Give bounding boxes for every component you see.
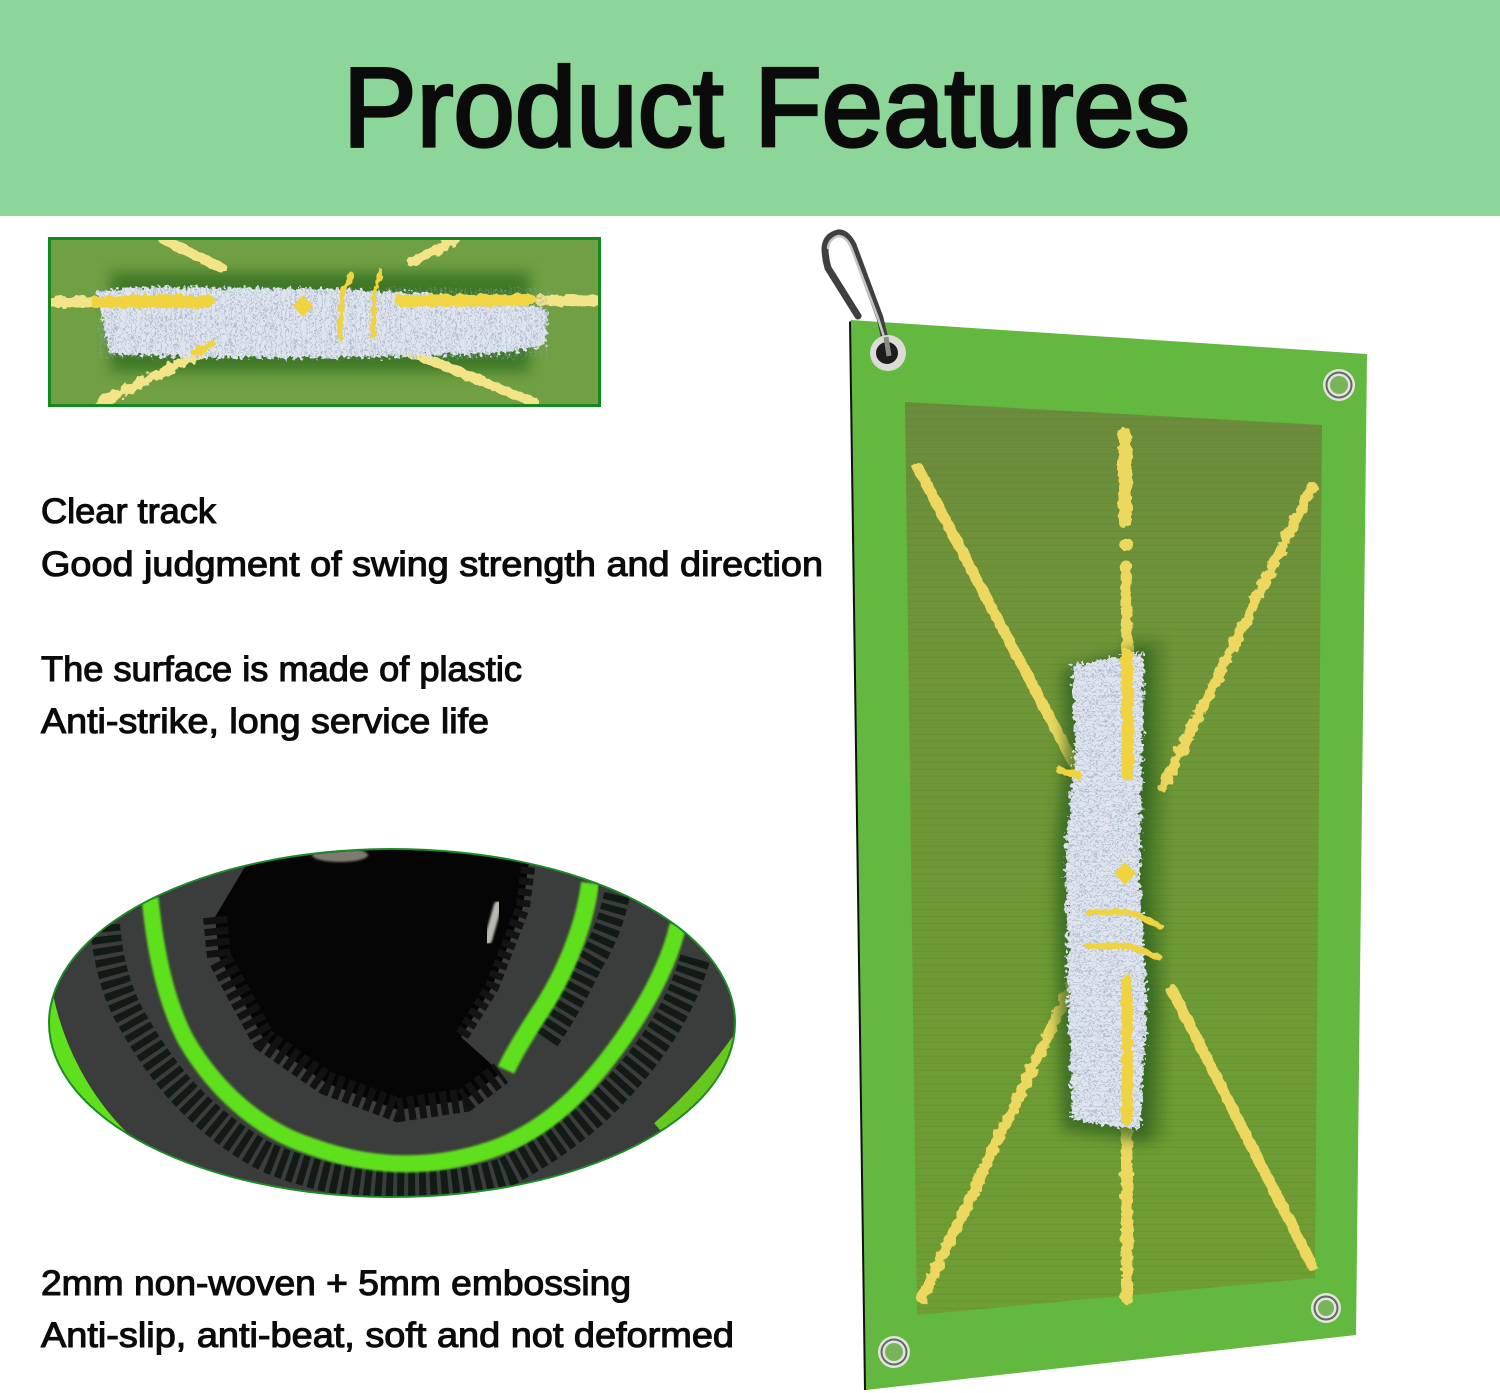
mat turf surface — [900, 400, 1330, 1320]
carabiner clip — [825, 233, 888, 352]
text block: plastic surface — [41, 650, 522, 741]
text block: plastic surface: Anti-strike, long service life — [41, 702, 489, 741]
metal glint — [488, 905, 498, 940]
inner right teeth row — [546, 895, 617, 1040]
black interior — [215, 845, 535, 1110]
text block: material layers: Anti-slip, anti-beat, soft and not deformed — [41, 1316, 734, 1355]
text block: clear track — [41, 492, 823, 584]
text block: plastic surface: The surface is made of plastic — [41, 650, 522, 689]
yellow guide lines — [918, 434, 1312, 1298]
product photo: swing mat — [825, 233, 1367, 1390]
text block: clear track: Good judgment of swing strength and direction — [41, 545, 823, 584]
green felt bands — [44, 883, 745, 1164]
header banner — [0, 0, 1500, 216]
mat felt border — [849, 320, 1367, 1390]
text block: clear track: Clear track — [41, 492, 217, 531]
panel: close-up of clear swing track — [48, 237, 601, 407]
white impact mark — [1055, 645, 1156, 1142]
yellow marks on impact area — [1060, 655, 1160, 1120]
grommet bottom left — [878, 1336, 910, 1368]
grommet top left — [870, 335, 906, 371]
text block: material layers: 2mm non-woven + 5mm embossing — [41, 1264, 631, 1303]
text block: material layers — [41, 1264, 734, 1355]
outer teeth row — [105, 925, 696, 1186]
grommet bottom right — [1311, 1293, 1341, 1323]
white impact mark — [97, 287, 548, 358]
grommet top right — [1323, 369, 1355, 401]
panel: oval close-up of mat thickness — [40, 840, 745, 1205]
title: Product Features — [343, 45, 1190, 170]
